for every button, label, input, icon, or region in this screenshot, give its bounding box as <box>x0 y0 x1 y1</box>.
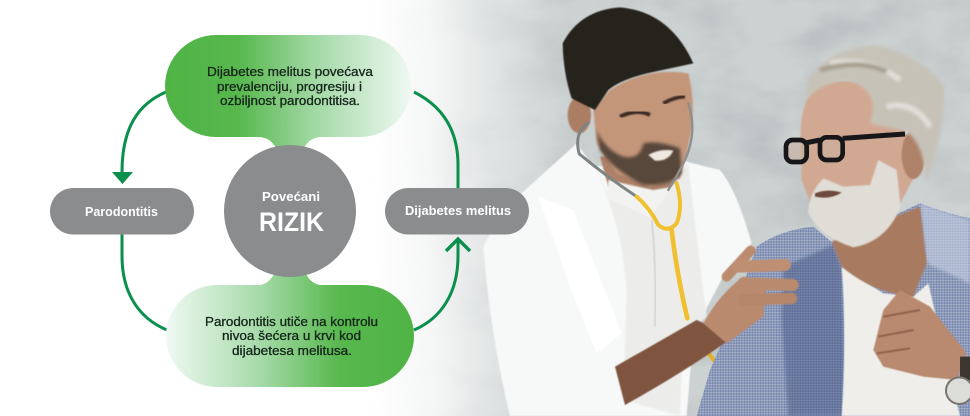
node: Parodontitis <box>50 188 194 234</box>
node: Dijabetes melitus <box>385 188 529 234</box>
patient glasses <box>786 134 905 162</box>
panel: periodontitis effect on blood sugar <box>166 274 414 387</box>
doctor beard <box>597 130 682 185</box>
patient hand and watch <box>873 290 970 404</box>
patient shirt <box>697 203 970 416</box>
doctor coat <box>483 143 752 416</box>
center circle: increased risk <box>224 145 356 277</box>
panel: diabetes effect on periodontitis <box>165 35 411 148</box>
panel text: dijabetesa melitusa. <box>232 343 352 358</box>
doctor neck <box>600 157 680 213</box>
panel text: prevalenciju, progresiju i <box>217 79 362 94</box>
arrow: top panel to Parodontitis <box>112 92 166 184</box>
patient t-shirt <box>842 267 960 416</box>
panel text: Dijabetes melitus povećava <box>207 64 374 79</box>
node: Parodontitis: Parodontitis <box>85 204 158 219</box>
node: Dijabetes melitus: Dijabetes melitus <box>405 203 511 218</box>
diagram: increased risk cycle <box>50 35 529 387</box>
panel text <box>205 314 378 358</box>
circle title: RIZIK <box>259 207 324 237</box>
patient hair <box>805 46 944 182</box>
arrow: bottom panel to Dijabetes melitus <box>414 239 470 330</box>
circle subtitle: Povećani <box>262 190 320 204</box>
stethoscope <box>578 103 715 362</box>
panel text: ozbiljnost parodontitisa. <box>220 93 360 108</box>
patient face <box>801 81 923 220</box>
doctor face <box>593 72 693 187</box>
photo: doctor and patient <box>372 0 970 416</box>
doctor eyes and smile <box>620 97 685 161</box>
arrow: top panel to Dijabetes melitus <box>414 92 458 188</box>
panel text: Parodontitis utiče na kontrolu <box>205 314 378 329</box>
patient <box>697 46 970 416</box>
patient beard <box>808 160 901 247</box>
doctor hair <box>563 7 693 110</box>
doctor shirt <box>587 143 707 416</box>
panel text <box>207 64 374 108</box>
arrow: Parodontitis to bottom panel <box>122 234 167 330</box>
panel text: nivoa šećera u krvi kod <box>222 328 361 343</box>
photo wall background <box>372 0 970 416</box>
doctor <box>483 7 752 416</box>
doctor arm and hand <box>615 251 793 405</box>
patient neck <box>832 207 927 297</box>
